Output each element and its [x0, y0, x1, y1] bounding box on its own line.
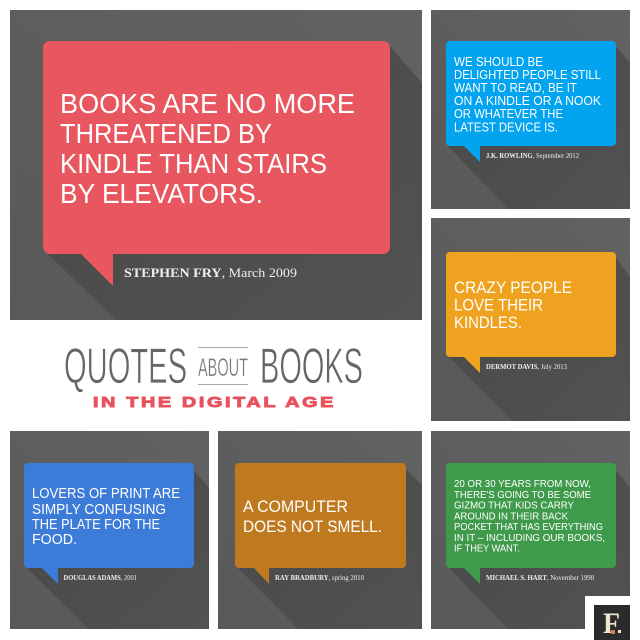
- logo badge: [585, 596, 640, 640]
- quote text: WANT TO READ, BE IT: [454, 81, 577, 95]
- speech bubble: orange: [446, 252, 616, 373]
- attribution: RAY BRADBURY, spring 2010: [275, 573, 364, 582]
- quote text: LATEST DEVICE IS.: [454, 120, 558, 134]
- quote text: OR WHATEVER THE: [454, 107, 563, 121]
- panel: Ray Bradbury quote: [218, 431, 422, 629]
- title: about with rules: [198, 347, 248, 385]
- attribution: DERMOT DAVIS, July 2013: [486, 362, 567, 371]
- quote text: FOOD.: [32, 531, 77, 548]
- quote text: THE PLATE FOR THE: [32, 516, 160, 533]
- attribution: J.K. ROWLING, September 2012: [486, 152, 579, 160]
- quote text: A COMPUTER: [243, 498, 348, 516]
- quote text: [454, 478, 605, 554]
- quote text: AROUND IN THEIR BACK: [454, 510, 568, 522]
- title: about with rules: ABOUT: [198, 354, 248, 382]
- attribution: DOUGLAS ADAMS, 2001: [64, 573, 137, 582]
- quote text: [454, 55, 602, 134]
- panel: Stephen Fry quote: [10, 10, 422, 320]
- panel: Douglas Adams quote: [10, 431, 209, 629]
- quote text: [243, 498, 382, 536]
- panel: Michael S. Hart quote: [431, 431, 630, 629]
- quote text: IF THEY WANT.: [454, 542, 520, 554]
- panel: J.K. Rowling quote: [431, 10, 630, 209]
- quote text: GIZMO THAT KIDS CARRY: [454, 500, 574, 512]
- quote text: KINDLE THAN STAIRS: [60, 148, 327, 179]
- logo badge: F: [603, 607, 620, 640]
- speech bubble: red: [43, 41, 390, 286]
- title: books: BOOKS: [260, 338, 363, 394]
- quote text: [60, 88, 355, 209]
- attribution: MICHAEL S. HART, November 1998: [486, 573, 594, 582]
- attribution: STEPHEN FRY , March 2009: [124, 265, 297, 280]
- quote text: THREATENED BY: [60, 118, 272, 149]
- quote text: [32, 485, 180, 548]
- quote text: LOVERS OF PRINT ARE: [32, 485, 180, 502]
- quote text: DOES NOT SMELL.: [243, 518, 382, 536]
- quote text: BY ELEVATORS.: [60, 178, 263, 209]
- quote text: IN IT – INCLUDING OUR BOOKS,: [454, 532, 605, 544]
- quote text: [454, 279, 572, 332]
- quote text: POCKET THAT HAS EVERYTHING: [454, 521, 603, 533]
- speech bubble: amber brown: [235, 463, 406, 584]
- speech bubble: green: [446, 463, 616, 584]
- speech bubble: light blue: [446, 41, 616, 162]
- speech bubble: blue: [24, 463, 194, 584]
- quote text: 20 OR 30 YEARS FROM NOW,: [454, 478, 591, 490]
- quote text: LOVE THEIR: [454, 296, 543, 314]
- quote text: DELIGHTED PEOPLE STILL: [454, 68, 601, 82]
- subtitle: IN THE DIGITAL AGE: [93, 394, 336, 411]
- panel: Dermot Davis quote: [431, 218, 630, 421]
- quote text: SIMPLY CONFUSING: [32, 501, 166, 518]
- quote text: KINDLES.: [454, 314, 522, 332]
- quote text: CRAZY PEOPLE: [454, 279, 572, 297]
- quote text: BOOKS ARE NO MORE: [60, 88, 355, 119]
- quote text: WE SHOULD BE: [454, 55, 543, 69]
- title: quotes: QUOTES: [64, 338, 187, 394]
- quote text: THERE'S GOING TO BE SOME: [454, 489, 591, 501]
- title block: [64, 338, 363, 411]
- quote text: ON A KINDLE OR A NOOK: [454, 94, 602, 108]
